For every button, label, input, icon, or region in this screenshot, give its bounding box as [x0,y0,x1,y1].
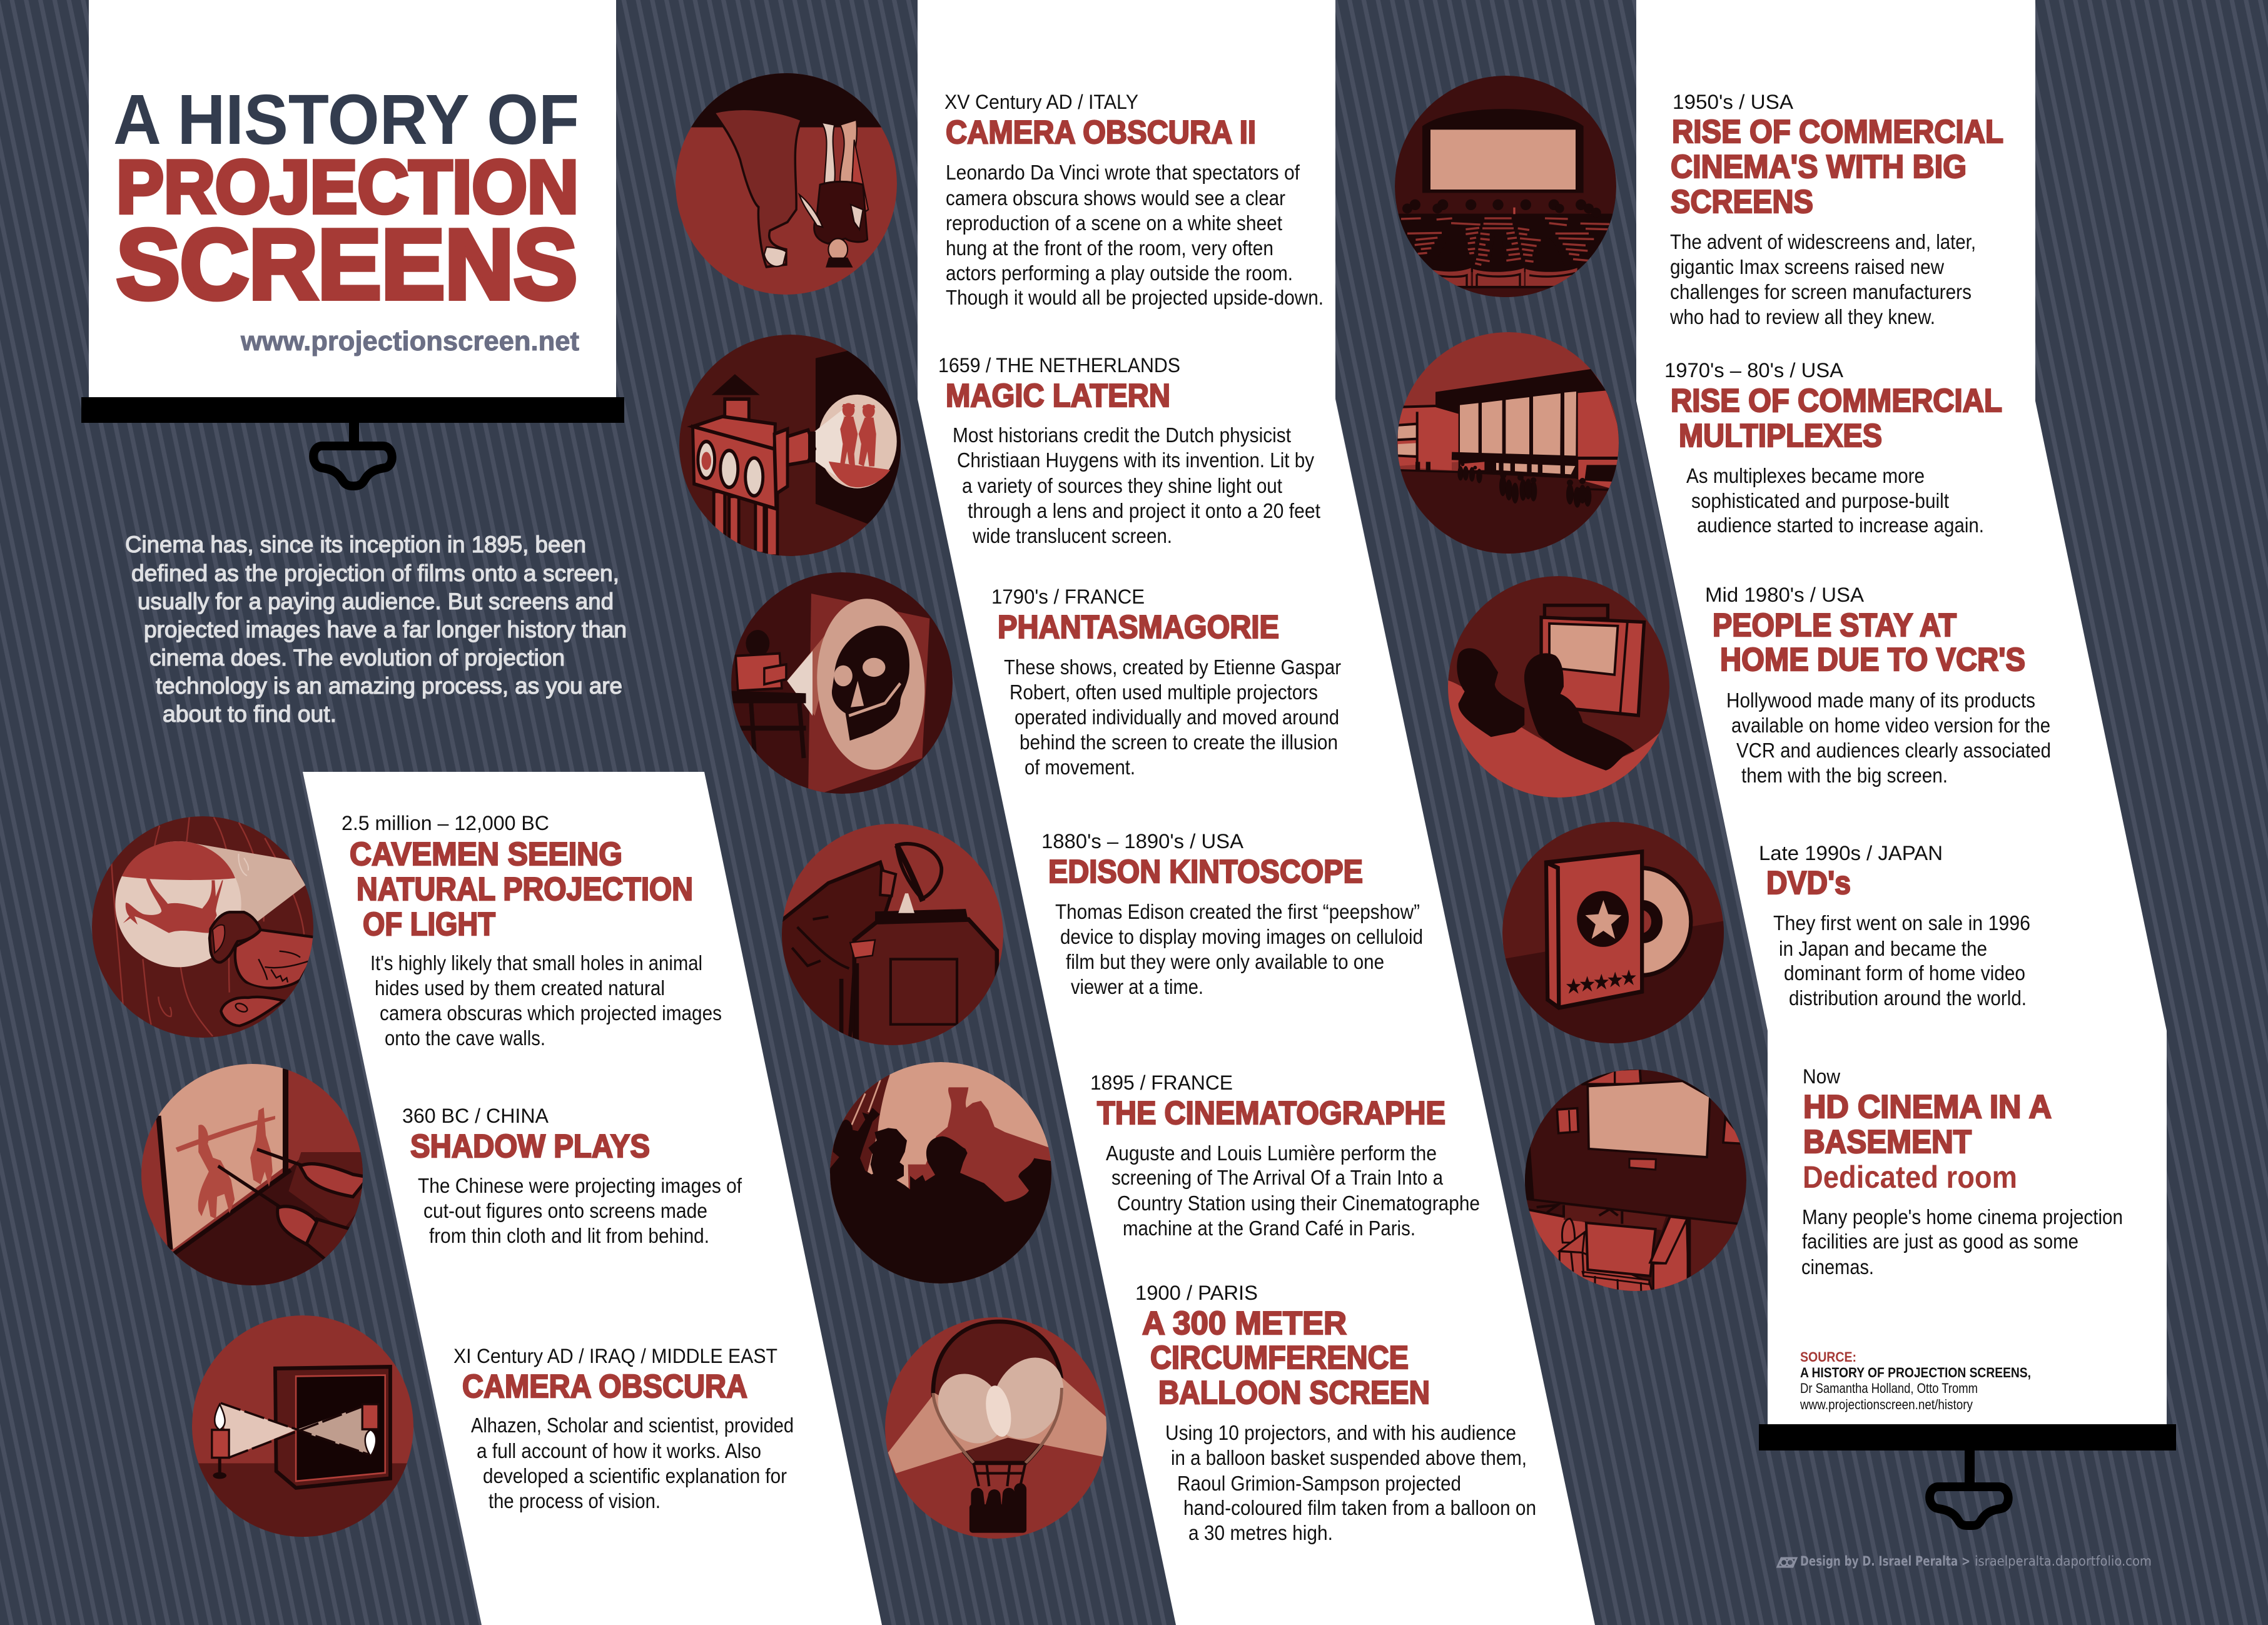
body text: cut-out figures onto screens made [423,1199,707,1222]
heading: MULTIPLEXES [1679,418,1882,454]
intro text: Cinema has, since its inception in 1895, been [125,532,586,557]
body text: wide translucent screen. [972,524,1172,547]
body text: facilities are just as good as some [1802,1230,2078,1253]
designer credit [1778,1554,2152,1569]
body text: viewer at a time. [1071,975,1203,998]
intro text: defined as the projection of films onto a screen, [131,560,619,586]
title: A HISTORY OF [113,80,579,159]
panel: lower left strip [303,772,882,1625]
date: 1790's / FRANCE [991,585,1145,608]
intro text: projected images have a far longer history than [144,617,627,642]
entry: camera obscura [453,1345,794,1512]
heading: RISE OF COMMERCIAL [1671,383,2002,419]
body text [946,161,1324,309]
date: 1659 / THE NETHERLANDS [938,354,1180,377]
designer credit: israelperalta.daportfolio.com [1975,1554,2152,1569]
body text: hides used by them created natural [375,976,665,1000]
body text: machine at the Grand Café in Paris. [1123,1217,1415,1240]
entry: phantasmagorie [991,585,1341,779]
body text: camera obscuras which projected images [380,1001,722,1025]
heading: DVD's [1766,865,1851,901]
body text: the process of vision. [489,1489,661,1512]
source credit: www.projectionscreen.net/history [1800,1397,1973,1412]
icon: magic lantern [679,335,907,556]
heading: CIRCUMFERENCE [1150,1340,1409,1376]
website url: www.projectionscreen.net [240,326,579,357]
body text: actors performing a play outside the room. [946,261,1293,285]
icon: cinematographe audience [828,1062,1057,1292]
screen roller bar and pull handle [81,397,624,486]
body text: They first went on sale in 1996 [1773,911,2030,934]
entry: shadow plays [402,1105,742,1247]
intro text: usually for a paying audience. But screens and [138,589,614,614]
body text [370,951,722,1050]
entry: VCR [1705,584,2051,787]
body text [1801,1205,2123,1278]
entry: cinematographe [1090,1071,1480,1240]
body text [1773,911,2030,1010]
icon: caveman seeing projection [92,816,315,1038]
body text: Robert, often used multiple projectors [1010,681,1318,704]
source credit [1800,1349,2031,1412]
date: Late 1990s / JAPAN [1759,842,1943,864]
body text: VCR and audiences clearly associated [1736,739,2051,762]
body text: reproduction of a scene on a white sheet [946,211,1282,235]
body text [1686,464,1984,537]
entry: magic lantern [938,354,1320,547]
body text: in a balloon basket suspended above them, [1171,1446,1527,1469]
heading: SCREENS [1671,184,1813,220]
heading [1803,1089,2052,1195]
body text: dominant form of home video [1784,961,2025,985]
body text: of movement. [1025,756,1135,779]
body text: sophisticated and purpose-built [1691,489,1949,512]
source credit: SOURCE: [1800,1349,1856,1365]
heading: Dedicated room [1803,1160,2017,1195]
body text: Using 10 projectors, and with his audience [1165,1421,1516,1444]
heading: CAMERA OBSCURA II [946,114,1256,151]
body text [1726,689,2051,787]
intro text [125,532,627,727]
title [113,80,579,320]
heading: BALLOON SCREEN [1158,1375,1430,1411]
body text: These shows, created by Etienne Gaspar [1004,656,1341,679]
body text: film but they were only available to one [1066,950,1384,973]
body text [953,423,1320,547]
panel: title screen [81,0,624,486]
body text: Auguste and Louis Lumière perform the [1106,1142,1437,1165]
date: XI Century AD / IRAQ / MIDDLE EAST [453,1345,777,1367]
heading: A 300 METER [1142,1305,1347,1342]
body text [1004,656,1341,779]
entry: camera obscura II [944,91,1324,309]
body text: device to display moving images on celluloid [1060,925,1423,948]
panel: right strip [1636,0,2167,1424]
body text: camera obscura shows would see a clear [946,186,1285,210]
date: Now [1803,1065,1841,1088]
body text: As multiplexes became more [1686,464,1925,487]
body text: who had to review all they knew. [1669,305,1935,328]
body text: a 30 metres high. [1188,1521,1333,1544]
heading: MAGIC LATERN [946,378,1170,414]
body text: available on home video version for the [1731,714,2050,737]
body text: Thomas Edison created the first “peepshow” [1055,900,1420,923]
body text [1055,900,1423,998]
body text: onto the cave walls. [385,1026,545,1050]
entry: commercial cinemas [1669,91,2003,328]
title: PROJECTION [116,145,579,229]
body text: distribution around the world. [1789,986,2027,1010]
entry: DVD [1759,842,2030,1010]
body text: Most historians credit the Dutch physicist [953,423,1291,447]
source credit: A HISTORY OF PROJECTION SCREENS, [1800,1365,2031,1380]
heading: CAVEMEN SEEING [350,836,622,873]
body text [1106,1142,1480,1240]
heading: PEOPLE STAY AT [1713,607,1957,644]
body text: hung at the front of the room, very often [946,236,1273,260]
body text: hand-coloured film taken from a balloon on [1183,1496,1536,1519]
body text [1165,1421,1536,1544]
body text: Raoul Grimion-Sampson projected [1177,1472,1461,1495]
body text: behind the screen to create the illusion [1020,731,1338,754]
icon: camera obscura box [187,1315,420,1547]
heading: THE CINEMATOGRAPHE [1097,1095,1445,1131]
icon: people watching VCR [1443,576,1673,802]
intro text: cinema does. The evolution of projection [149,645,565,671]
body text: a full account of how it works. Also [477,1439,761,1462]
date: 1880's – 1890's / USA [1041,830,1244,853]
intro text: about to find out. [163,701,337,727]
entry: edison [1041,830,1423,998]
source credit: Dr Samantha Holland, Otto Tromm [1800,1380,1978,1396]
body text: operated individually and moved around [1015,706,1339,729]
body text: gigantic Imax screens raised new [1670,255,1944,278]
date: 2.5 million – 12,000 BC [342,812,549,834]
heading [350,836,693,943]
screen roller bar and pull handle [1759,1424,2176,1526]
body text: Christiaan Huygens with its invention. Lit by [957,448,1314,472]
heading [1713,607,2025,678]
intro text: technology is an amazing process, as you are [156,673,622,699]
body text: from thin cloth and lit from behind. [429,1224,709,1247]
heading [1671,114,2003,220]
icon: balloon screen [885,1317,1108,1539]
body text: developed a scientific explanation for [483,1464,787,1487]
entry: balloon [1135,1282,1536,1544]
date: 1895 / FRANCE [1090,1071,1233,1094]
heading: SHADOW PLAYS [410,1128,650,1165]
body text: through a lens and project it onto a 20 feet [968,499,1320,522]
body text: It's highly likely that small holes in animal [370,951,702,974]
body text [418,1174,742,1247]
body text: cinemas. [1801,1255,1874,1278]
title: SCREENS [116,210,577,320]
body text: screening of The Arrival Of a Train Into a [1111,1166,1444,1189]
body text: Many people's home cinema projection [1802,1205,2123,1228]
icon: multiplex building [1396,332,1620,557]
date: XV Century AD / ITALY [944,91,1138,113]
body text: a variety of sources they shine light out [962,474,1282,497]
body text: Leonardo Da Vinci wrote that spectators of [946,161,1300,184]
heading: HOME DUE TO VCR'S [1720,642,2025,678]
body text: Hollywood made many of its products [1726,689,2035,712]
body text: Though it would all be projected upside-down. [946,286,1324,309]
heading: CAMERA OBSCURA [462,1369,747,1405]
date: Mid 1980's / USA [1705,584,1865,606]
heading [1671,383,2002,454]
icon: shadow plays [141,1064,363,1285]
body text: audience started to increase again. [1697,514,1984,537]
icon: edison kinetoscope [776,824,1003,1056]
body text: challenges for screen manufacturers [1670,280,1972,303]
heading [1142,1305,1430,1411]
panel: middle strip [918,0,1595,1625]
entry: multiplexes [1664,359,2002,537]
date: 1950's / USA [1673,91,1794,113]
entry: cavemen [342,812,722,1050]
heading: NATURAL PROJECTION [357,871,693,908]
body text [1669,230,1976,328]
body text: in Japan and became the [1779,937,1987,960]
date: 1970's – 80's / USA [1664,359,1844,382]
icon: home cinema room [1522,1068,1746,1295]
designer credit: Design by D. Israel Peralta > [1800,1554,1970,1569]
body text: The Chinese were projecting images of [418,1174,742,1197]
heading: PHANTASMAGORIE [998,609,1279,645]
date: 1900 / PARIS [1135,1282,1258,1304]
body text: Country Station using their Cinematographe [1117,1192,1480,1215]
date: 360 BC / CHINA [402,1105,549,1127]
heading: OF LIGHT [363,906,495,943]
heading: RISE OF COMMERCIAL [1672,114,2003,150]
icon: cinema big screen [1395,76,1616,298]
icon: DVD case and disc [1491,822,1726,1051]
heading: HD CINEMA IN A [1803,1089,2052,1125]
heading: BASEMENT [1803,1124,1972,1160]
body text: Alhazen, Scholar and scientist, provided [471,1414,794,1437]
icon: upside-down figures [674,70,898,295]
entry: HD cinema [1801,1065,2123,1278]
body text: them with the big screen. [1741,764,1948,787]
heading: CINEMA'S WITH BIG [1671,149,1967,185]
body text [471,1414,794,1512]
icon: phantasmagorie skull [729,572,953,798]
heading: EDISON KINTOSCOPE [1048,854,1363,890]
body text: The advent of widescreens and, later, [1670,230,1976,253]
